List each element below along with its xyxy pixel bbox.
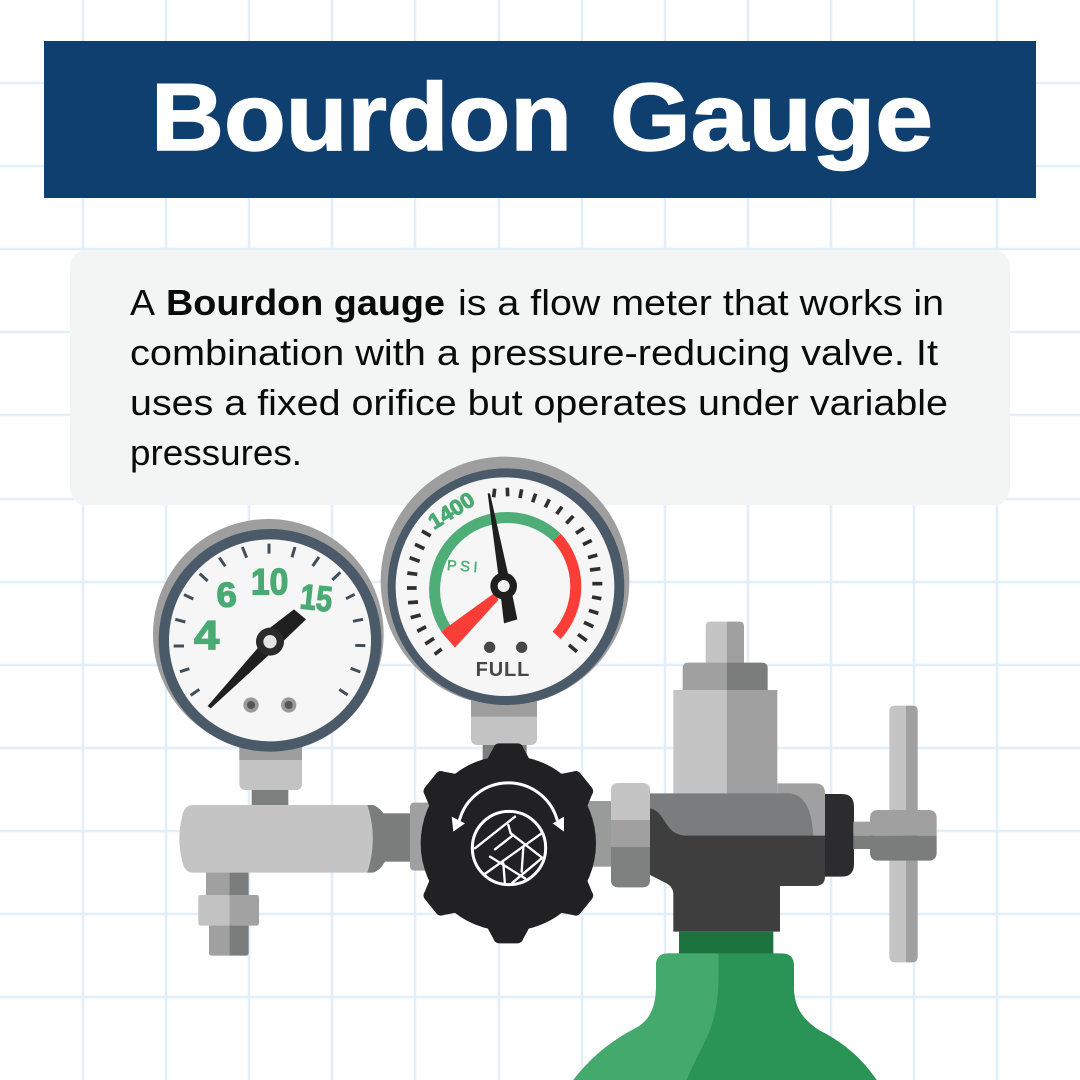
scale numbers: 6 [215, 576, 238, 615]
definition text: Bourdon gauge [166, 282, 445, 323]
green tank neck [679, 932, 773, 955]
FULL label: FULL [476, 659, 529, 681]
1400 label: 1400 [424, 487, 479, 534]
green tank [573, 953, 877, 1080]
gauge stem [471, 700, 537, 763]
right gauge [381, 457, 629, 763]
T handle [853, 706, 937, 962]
icon: hatched dial [472, 811, 546, 885]
gauge stem [239, 747, 302, 790]
tick marks [174, 544, 365, 695]
scale numbers [194, 561, 334, 658]
red wedge [441, 593, 498, 648]
black control knob [416, 743, 601, 943]
dots [484, 642, 527, 653]
scale numbers: 15 [298, 577, 334, 620]
title banner [44, 41, 1036, 198]
definition text: uses a fixed orifice but operates under variable [130, 382, 948, 423]
regulator body lower [650, 808, 825, 932]
definition text: A [130, 282, 155, 323]
dark collar [825, 794, 854, 877]
panel: definition [70, 250, 1010, 505]
connector [587, 801, 612, 867]
red arc [557, 537, 576, 635]
regulator and tank [573, 622, 937, 1080]
left fitting and cylinder [179, 788, 433, 956]
needle [208, 609, 306, 708]
icon: rotation arrow [452, 783, 564, 832]
green arc [435, 517, 557, 628]
definition text: is a flow meter that works in [458, 282, 944, 323]
title: Gauge [610, 64, 933, 171]
definition text [130, 282, 948, 473]
definition text: pressures. [130, 432, 302, 473]
scale numbers: 10 [251, 561, 288, 602]
title: Bourdon [151, 64, 572, 171]
hex nut [611, 783, 650, 887]
top cap [683, 622, 768, 691]
tick marks [407, 488, 602, 654]
screws [243, 697, 296, 713]
needle [488, 493, 517, 623]
PSI label: PSI [446, 558, 478, 576]
regulator body upper [650, 690, 825, 840]
definition text: combination with a pressure-reducing valve. It [130, 332, 938, 373]
title [151, 64, 933, 171]
scale numbers: 4 [194, 612, 220, 658]
left gauge [153, 519, 384, 790]
